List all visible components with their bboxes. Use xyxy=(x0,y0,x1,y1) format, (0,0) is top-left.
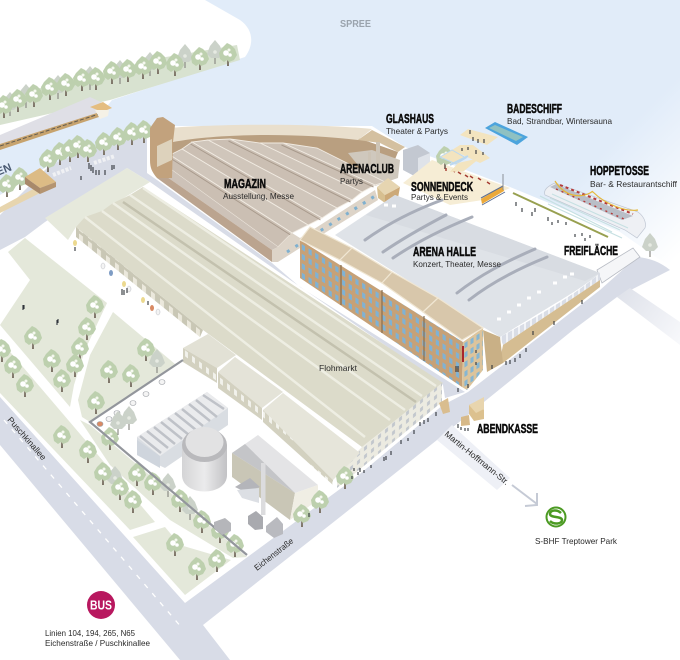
Hoppetosse xyxy=(590,163,678,189)
lawn by Flohmarkt xyxy=(45,168,150,240)
sawtooth hall xyxy=(137,392,228,468)
label: Spree: SPREE xyxy=(340,18,371,30)
annex roofs xyxy=(183,334,236,368)
queue xyxy=(458,424,468,431)
venue labels xyxy=(340,101,678,269)
roof ridges xyxy=(85,188,436,437)
label: Abendkasse: ABENDKASSE xyxy=(477,421,538,436)
tan roofs xyxy=(300,227,483,340)
Badeschiff: BADESCHIFF xyxy=(507,101,562,116)
street label: Martin-Hoffmann-Str. xyxy=(443,429,511,487)
park lawns xyxy=(0,238,247,595)
small building south bank xyxy=(0,168,56,213)
Glashaus xyxy=(386,111,448,136)
gas tank xyxy=(182,427,227,492)
block dividers xyxy=(341,265,424,361)
brick building xyxy=(300,227,483,390)
sublabel: Ausstellung, Messe: Ausstellung, Messe xyxy=(223,191,294,201)
trees along Eichenstrasse xyxy=(293,466,354,527)
rear grey buildings xyxy=(348,150,400,186)
crowd along street xyxy=(309,300,582,517)
Flohmarkt building xyxy=(76,187,443,488)
roads xyxy=(0,257,680,660)
curved roof band xyxy=(167,125,372,142)
Martin-Hoffmann-Strasse with arrow xyxy=(437,425,537,506)
chimneys xyxy=(368,142,380,164)
Arena Halle xyxy=(335,195,600,372)
piers xyxy=(460,129,498,145)
Abendkasse kiosks xyxy=(439,397,538,436)
Glashaus building xyxy=(403,145,430,178)
Arenaclub: ARENACLUB xyxy=(340,161,394,176)
front wall xyxy=(157,160,278,250)
corner tower xyxy=(150,117,175,178)
Sonnendeck xyxy=(403,146,510,205)
deck visitors and chairs xyxy=(446,168,490,184)
Badeschiff xyxy=(440,122,528,172)
south bank trees xyxy=(0,120,153,197)
end facade xyxy=(337,383,442,488)
Arena Halle xyxy=(413,244,501,269)
sawtooth roofs xyxy=(158,139,385,247)
bus icon xyxy=(87,591,115,619)
bus icon: BUS xyxy=(90,598,112,612)
street label: Eichenstraße: Eichenstraße xyxy=(252,536,296,573)
S-Bahn icon xyxy=(546,508,566,526)
roof hatches xyxy=(384,205,574,319)
skylights xyxy=(365,200,547,300)
gap beside brick building xyxy=(278,248,300,287)
Arenaclub pavilion xyxy=(377,178,400,203)
bus info xyxy=(45,628,150,648)
parked cars in yard xyxy=(97,380,165,426)
pier visitors xyxy=(462,130,484,155)
entrance ramp xyxy=(597,248,640,283)
Hoppetosse ship xyxy=(540,181,645,238)
wake xyxy=(540,196,622,238)
Hoppetosse: HOPPETOSSE xyxy=(590,163,649,178)
Sonnendeck: SONNENDECK xyxy=(411,179,473,194)
Arenaclub xyxy=(340,161,394,186)
Sonnendeck xyxy=(411,179,473,202)
Magazin building xyxy=(150,117,405,262)
people on lawn xyxy=(23,305,58,325)
arrow xyxy=(512,485,537,506)
street label: Puschkinallee: Puschkinallee xyxy=(5,415,49,462)
power house xyxy=(214,435,318,538)
Glashaus: Theater & Partys xyxy=(386,126,448,136)
courtyard xyxy=(158,132,398,184)
utility boxes xyxy=(214,518,231,535)
plaza xyxy=(0,120,465,398)
bus info: Linien 104, 194, 265, N65 xyxy=(45,628,135,638)
Glashaus: GLASHAUS xyxy=(386,111,434,126)
Hoppetosse: Bar- & Restaurantschiff xyxy=(590,179,678,189)
label: Flohmarkt: Flohmarkt xyxy=(319,363,358,373)
visitors on plaza xyxy=(81,163,127,180)
annex walls xyxy=(183,348,217,383)
park trees xyxy=(0,295,244,580)
Freifläche visitors xyxy=(516,202,590,241)
yellow garland xyxy=(555,181,638,210)
bus info: Eichenstraße / Puschkinallee xyxy=(45,638,150,648)
Arena Halle: ARENA HALLE xyxy=(413,244,476,259)
orange gangway xyxy=(481,186,504,204)
Badeschiff: Bad, Strandbar, Wintersauna xyxy=(507,116,612,126)
hall glass facade xyxy=(500,273,600,345)
Puschkinallee centre line xyxy=(4,420,182,628)
S-Bahn label: S-BHF Treptower Park xyxy=(535,536,618,546)
SE gable wall xyxy=(272,190,378,262)
side wall xyxy=(76,227,203,337)
Freifläche xyxy=(513,193,658,283)
tree at quay xyxy=(642,233,658,257)
parked cars on plaza xyxy=(53,156,115,175)
north bank promenade xyxy=(0,97,112,150)
Arenaclub: Partys xyxy=(340,176,363,186)
main roof xyxy=(76,187,443,447)
Sonnendeck: Partys & Events xyxy=(411,192,468,202)
factory yard fence xyxy=(90,360,247,555)
label: Magazin: MAGAZIN xyxy=(224,176,266,191)
yard trees xyxy=(110,406,137,435)
red sign xyxy=(462,346,464,362)
north bank tree line xyxy=(0,40,240,125)
Freifläche: FREIFLÄCHE xyxy=(564,243,618,258)
valley shadows xyxy=(168,141,374,235)
pool xyxy=(485,122,528,145)
Arena Halle: Konzert, Theater, Messe xyxy=(413,259,501,269)
chimney xyxy=(261,463,266,515)
palm at deck xyxy=(436,146,454,169)
Badeschiff xyxy=(507,101,612,126)
parked cars at Flohmarkt xyxy=(73,240,160,315)
